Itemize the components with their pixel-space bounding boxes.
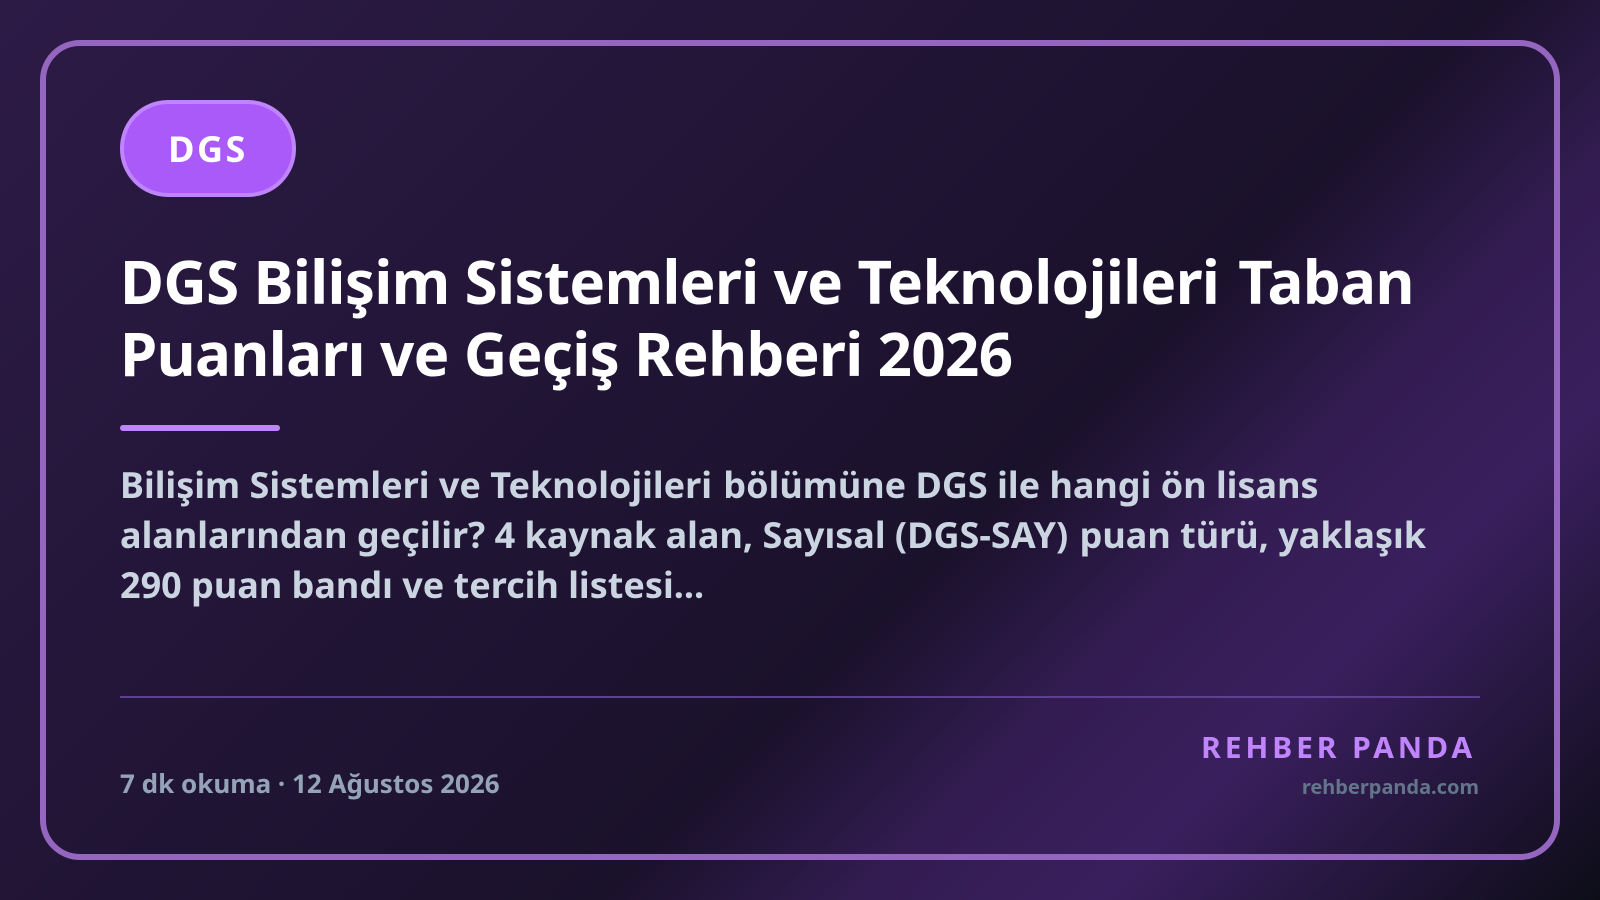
title xyxy=(120,240,1414,394)
title: Puanları ve Geçiş Rehberi 2026 xyxy=(120,312,1012,394)
description: alanlarından geçilir? 4 kaynak alan, Sayısal (DGS-SAY) puan türü, yaklaşık xyxy=(120,510,1426,559)
category badge xyxy=(120,100,296,197)
category badge: DGS xyxy=(168,124,248,173)
description xyxy=(120,460,1426,609)
reading time and date: 7 dk okuma · 12 Ağustos 2026 xyxy=(120,765,500,801)
description: 290 puan bandı ve tercih listesi... xyxy=(120,560,704,609)
brand name: REHBER PANDA xyxy=(1201,726,1476,767)
footer divider xyxy=(120,696,1480,698)
accent bar xyxy=(120,425,280,431)
title: DGS Bilişim Sistemleri ve Teknolojileri Taban xyxy=(120,240,1414,322)
website: rehberpanda.com xyxy=(1302,773,1479,800)
description: Bilişim Sistemleri ve Teknolojileri bölümüne DGS ile hangi ön lisans xyxy=(120,460,1319,509)
